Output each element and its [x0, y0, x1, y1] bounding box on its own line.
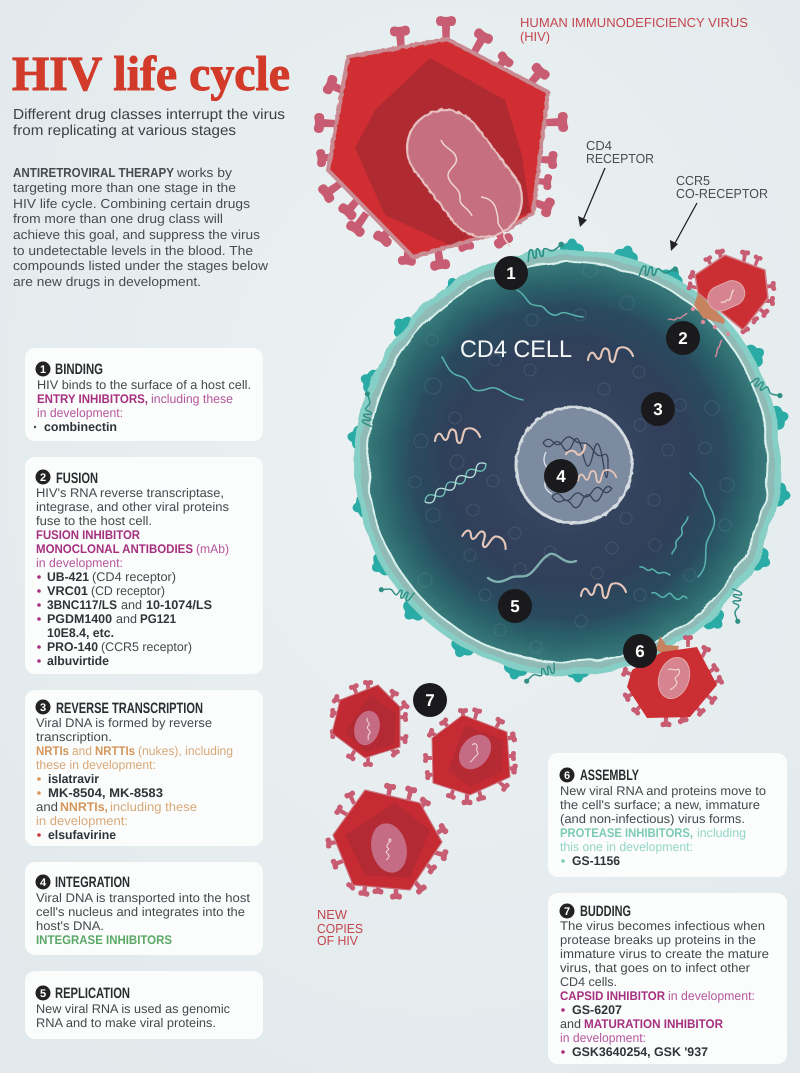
panel: assembly [548, 753, 787, 877]
text: replication: RNA and to make viral proteins. [36, 1016, 216, 1030]
text: reverse transcription: MK-8504, MK-8583 [48, 786, 163, 800]
text: budding: CAPSID INHIBITOR [560, 989, 665, 1003]
fusing virion [668, 248, 776, 357]
intro paragraph: from more than one drug class will [13, 211, 223, 226]
envelope [627, 647, 717, 718]
text: reverse transcription: in development: [36, 814, 128, 828]
heading: reverse transcription [36, 700, 203, 717]
text: integration: Viral DNA is transported into the host [36, 891, 251, 905]
text: fusion [36, 486, 229, 668]
heading: binding: BINDING [55, 361, 103, 378]
text: fusion: albuvirtide [47, 654, 109, 668]
label: CD4 receptor [586, 138, 654, 166]
step marker 6 [623, 634, 657, 668]
label: HIV: HUMAN IMMUNODEFICIENCY VIRUS [520, 15, 748, 30]
heading: budding [560, 903, 631, 920]
intro paragraph: targeting more than one stage in the [13, 180, 236, 195]
panel: integration [25, 862, 263, 955]
envelope [328, 39, 548, 257]
label: CCR5 co-receptor [676, 173, 768, 201]
text: fusion: PGDM1400 [47, 612, 112, 626]
fusion site [668, 293, 730, 357]
spikes [423, 707, 518, 805]
step marker 2: 2 [678, 329, 688, 348]
text: reverse transcription: including these [110, 800, 197, 814]
intro paragraph: ANTIRETROVIRAL THERAPY [13, 165, 174, 180]
text: budding: in development: [668, 989, 755, 1003]
text: integration: INTEGRASE INHIBITORS [36, 933, 172, 947]
spikes [330, 680, 411, 767]
heading: fusion [36, 470, 98, 487]
new HIV copy C [325, 782, 449, 900]
step marker 5 [498, 589, 532, 623]
arrow: CD4 receptor [578, 168, 605, 227]
nucleus [516, 407, 632, 523]
text: fusion: HIV's RNA reverse transcriptase, [36, 486, 224, 500]
receptor bumps [346, 238, 792, 683]
chromosome DNA [543, 437, 612, 508]
label: CD4 receptor: RECEPTOR [586, 151, 654, 166]
capsid [350, 708, 384, 748]
text: assembly: PROTEASE INHIBITORS, [560, 826, 693, 840]
text: budding [560, 919, 769, 1059]
capsid [366, 820, 412, 876]
viral RNA strands [435, 290, 715, 599]
text: budding: immature virus to create the mature [560, 947, 769, 961]
heading: integration: 4 [40, 877, 47, 889]
heading: replication: REPLICATION [55, 985, 130, 1002]
new HIV copy B [423, 707, 518, 805]
text: budding: MATURATION INHIBITOR [584, 1017, 723, 1031]
text: assembly: this one in development: [560, 840, 693, 854]
text: reverse transcription: transcription. [36, 730, 112, 744]
text: budding: in development: [560, 1031, 646, 1045]
label: new copies of HIV: NEW [317, 907, 348, 922]
heading: budding: 7 [564, 906, 570, 918]
text: assembly: the cell's surface; a new, immature [560, 798, 760, 812]
title: HIV life cycle [12, 46, 290, 101]
text: fusion: (CCR5 receptor) [101, 640, 192, 654]
panel: fusion [25, 457, 263, 674]
membrane [355, 249, 781, 675]
step marker 3: 3 [653, 400, 663, 419]
intro paragraph: works by [176, 165, 233, 180]
large HIV virion [314, 16, 568, 271]
shading [345, 803, 430, 878]
inner shading [355, 58, 530, 245]
text: fusion: PRO-140 [47, 640, 98, 654]
text: budding: GSK3640254, GSK '937 [572, 1045, 708, 1059]
shading [448, 725, 503, 787]
label: HIV: (HIV) [520, 29, 550, 44]
text: binding: ENTRY INHIBITORS, [37, 392, 148, 406]
heading: fusion: 2 [40, 472, 46, 484]
curly receptors [359, 242, 783, 683]
capsid [452, 728, 498, 776]
label: CCR5 co-receptor: CO-RECEPTOR [676, 186, 768, 201]
label: new copies of HIV: COPIES [317, 921, 363, 936]
text: assembly: including [697, 826, 746, 840]
text: binding: including these [151, 392, 233, 406]
text: budding: and [560, 1017, 581, 1031]
text: reverse transcription: islatravir [48, 772, 99, 786]
heading: assembly [560, 767, 639, 784]
envelope [333, 790, 442, 890]
label: CD4 receptor: CD4 [586, 138, 612, 153]
text: reverse transcription: NNRTIs, [60, 800, 108, 814]
envelope [695, 255, 768, 330]
text: fusion: integrase, and other viral proteins [36, 500, 229, 514]
label: CD4 cell: CD4 CELL [460, 336, 572, 363]
heading: integration: INTEGRATION [55, 874, 130, 891]
text: assembly: GS-1156 [572, 854, 620, 868]
text: fusion: MONOCLONAL ANTIBODIES [36, 542, 193, 556]
text: fusion: and [116, 612, 137, 626]
text: fusion: (CD4 receptor) [92, 570, 176, 584]
text: fusion: FUSION INHIBITOR [36, 528, 140, 542]
text: reverse transcription: these in development: [36, 758, 156, 772]
text: fusion: in development: [36, 556, 123, 570]
subtitle: from replicating at various stages [13, 123, 236, 139]
text: budding: virus, that goes on to infect other [560, 961, 750, 975]
text: integration: host's DNA. [36, 919, 104, 933]
step marker 2 [666, 321, 700, 355]
text: fusion: 3BNC117/LS [47, 598, 117, 612]
step marker 4: 4 [556, 467, 566, 486]
envelope [332, 685, 400, 758]
shading [345, 695, 396, 752]
panel: reverse transcription [25, 690, 263, 846]
text: budding: protease breaks up proteins in the [560, 933, 756, 947]
text: binding: HIV binds to the surface of a host cell. [37, 378, 251, 392]
text: reverse transcription: and [72, 744, 92, 758]
text: budding: CD4 cells. [560, 975, 617, 989]
text: reverse transcription: NRTTIs [95, 744, 135, 758]
intro paragraph: compounds listed under the stages below [13, 258, 269, 273]
text: reverse transcription: Viral DNA is formed by reverse [36, 716, 212, 730]
text: assembly: (and non-infectious) virus forms. [560, 812, 745, 826]
spikes [686, 248, 776, 335]
step marker 4 [544, 459, 578, 493]
heading: binding [36, 361, 103, 378]
text: binding: in development: [37, 406, 123, 420]
text: reverse transcription [36, 716, 233, 842]
capsid [392, 95, 537, 252]
intro paragraph: are new drugs in development. [13, 274, 201, 289]
step marker 7 [413, 683, 447, 717]
intro paragraph: HIV life cycle. Combining certain drugs [13, 196, 251, 211]
subtitle [13, 107, 285, 139]
text: fusion: 10E8.4, etc. [47, 626, 114, 640]
panel: replication [25, 971, 263, 1039]
heading: budding: BUDDING [580, 903, 631, 920]
text: fusion: fuse to the host cell. [36, 514, 152, 528]
text: replication: New viral RNA is used as genomic [36, 1002, 230, 1016]
text: budding: GS-6207 [572, 1003, 622, 1017]
label: CCR5 co-receptor: CCR5 [676, 173, 710, 188]
heading: replication [36, 985, 130, 1002]
heading: reverse transcription: 3 [40, 702, 46, 714]
bud neck [656, 636, 679, 660]
text: reverse transcription: NRTIs [36, 744, 69, 758]
capsid [704, 277, 749, 315]
step marker 6: 6 [635, 642, 645, 661]
new HIV copy A [330, 680, 411, 767]
intro paragraph: to undetectable levels in the blood. The [13, 243, 253, 258]
text: fusion: (mAb) [196, 542, 229, 556]
label: new copies of HIV: OF HIV [317, 933, 358, 948]
text: integration [36, 891, 251, 947]
panel: binding [25, 348, 263, 441]
text: binding [34, 378, 251, 434]
intro paragraph: achieve this goal, and suppress the virus [13, 227, 261, 242]
heading: binding: 1 [40, 364, 46, 376]
heading: integration [36, 874, 130, 891]
CD4 cell [346, 238, 792, 683]
text: fusion: PG121 [140, 612, 176, 626]
capsid [653, 653, 695, 703]
spikes [314, 16, 568, 271]
text: assembly [560, 784, 766, 868]
spikes [325, 782, 449, 900]
step marker 1 [494, 256, 528, 290]
spikes [620, 635, 725, 727]
text: reverse transcription: and [36, 800, 58, 814]
subtitle: Different drug classes interrupt the virus [13, 107, 285, 123]
heading: replication: 5 [40, 988, 46, 1000]
step marker 3 [641, 392, 675, 426]
label: HIV [520, 15, 748, 44]
budding virion [620, 635, 725, 727]
intro paragraph [13, 165, 269, 289]
text: integration: cell's nucleus and integrates into the [36, 905, 245, 919]
text: assembly: New viral RNA and proteins move to [560, 784, 766, 798]
cytoplasmic DNA [423, 460, 488, 505]
vesicles [409, 263, 734, 653]
text: fusion: (CD receptor) [91, 584, 165, 598]
label: new copies of HIV [317, 907, 363, 948]
arrow: CCR5 co-receptor [670, 203, 697, 251]
step marker 1: 1 [506, 264, 516, 283]
heading: assembly: ASSEMBLY [580, 767, 639, 784]
text: fusion: UB-421 [47, 570, 89, 584]
text: reverse transcription: elsufavirine [48, 828, 116, 842]
panel: budding [548, 893, 787, 1064]
heading: reverse transcription: REVERSE TRANSCRIPTION [56, 700, 203, 717]
text: budding: The virus becomes infectious when [560, 919, 765, 933]
text: fusion: VRC01 [47, 584, 88, 598]
text: reverse transcription: (nukes), including [138, 744, 233, 758]
step marker 5: 5 [510, 597, 520, 616]
heading: fusion: FUSION [56, 470, 98, 487]
text: binding: combinectin [44, 420, 117, 434]
text: fusion: and [121, 598, 142, 612]
text: replication [36, 1002, 230, 1030]
RNA [441, 140, 510, 247]
heading: assembly: 6 [564, 770, 570, 782]
step marker 7: 7 [425, 691, 435, 710]
text: fusion: 10-1074/LS [146, 598, 212, 612]
envelope [432, 715, 510, 795]
